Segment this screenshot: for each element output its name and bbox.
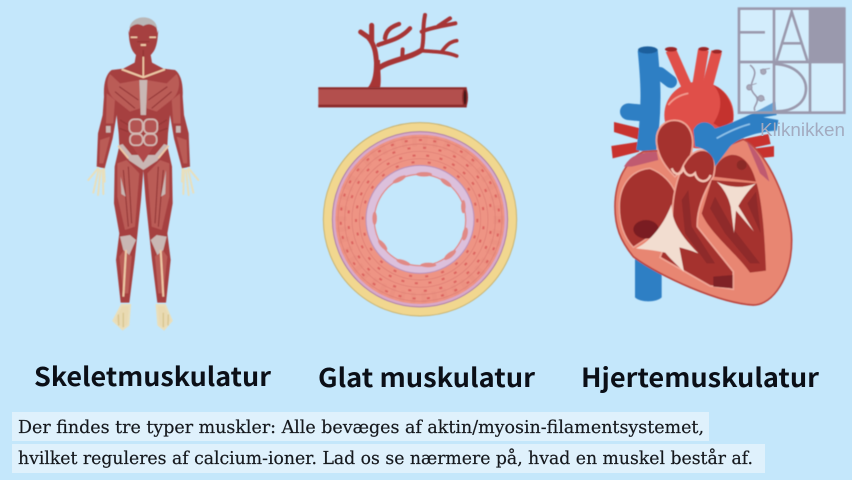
logo: FADI Kliknikken xyxy=(739,7,844,113)
muscle striations xyxy=(115,42,172,227)
right ventricle xyxy=(660,150,733,289)
horizontal blood vessel xyxy=(318,87,468,107)
logo cells xyxy=(740,9,843,112)
clavicle and shin lines xyxy=(118,37,169,297)
illustration: skeletal muscle body xyxy=(88,17,198,329)
logo wordmark: Kliknikken xyxy=(760,120,845,140)
right atrium cavity xyxy=(619,168,675,247)
pulmonary artery xyxy=(693,102,778,167)
heading: Skeletmuskulatur: Skeletmuskulatur xyxy=(34,357,272,394)
caption line 1: Der findes tre typer muskler: Alle bevæges af aktin/myosin-filamentsystemet, xyxy=(18,417,704,438)
inferior vena cava xyxy=(635,253,662,301)
heading: Glat muskulatur: Glat muskulatur xyxy=(318,358,536,395)
tendons and fascia xyxy=(106,80,181,255)
logo filled cell xyxy=(810,7,844,62)
heart wall xyxy=(615,139,792,305)
muscle mesh texture xyxy=(338,137,502,301)
vessel cross-section xyxy=(323,123,517,316)
superior vena cava xyxy=(628,50,671,152)
pubic muscle xyxy=(132,146,154,163)
pulmonary veins xyxy=(611,122,774,159)
hands and feet xyxy=(88,168,198,329)
head cap xyxy=(129,17,157,28)
chordae and valves xyxy=(636,182,756,272)
illustration: heart xyxy=(611,46,792,305)
aorta xyxy=(671,50,717,90)
lighter muscle groups xyxy=(99,74,187,293)
logo letter lines xyxy=(739,9,844,113)
illustration: smooth muscle xyxy=(318,15,517,316)
branching blood vessel xyxy=(361,15,457,88)
heading: Hjertemuskulatur: Hjertemuskulatur xyxy=(581,358,820,395)
abdominal muscles xyxy=(129,119,157,145)
left ventricle xyxy=(702,180,766,273)
caption line 2: hvilket reguleres af calcium-ioner. Lad os se nærmere på, hvad en muskel består af. xyxy=(18,447,753,469)
left atrium xyxy=(656,120,693,177)
endothelial bumps xyxy=(372,172,469,267)
logo plant xyxy=(747,65,770,111)
muscle silhouette xyxy=(97,18,190,303)
